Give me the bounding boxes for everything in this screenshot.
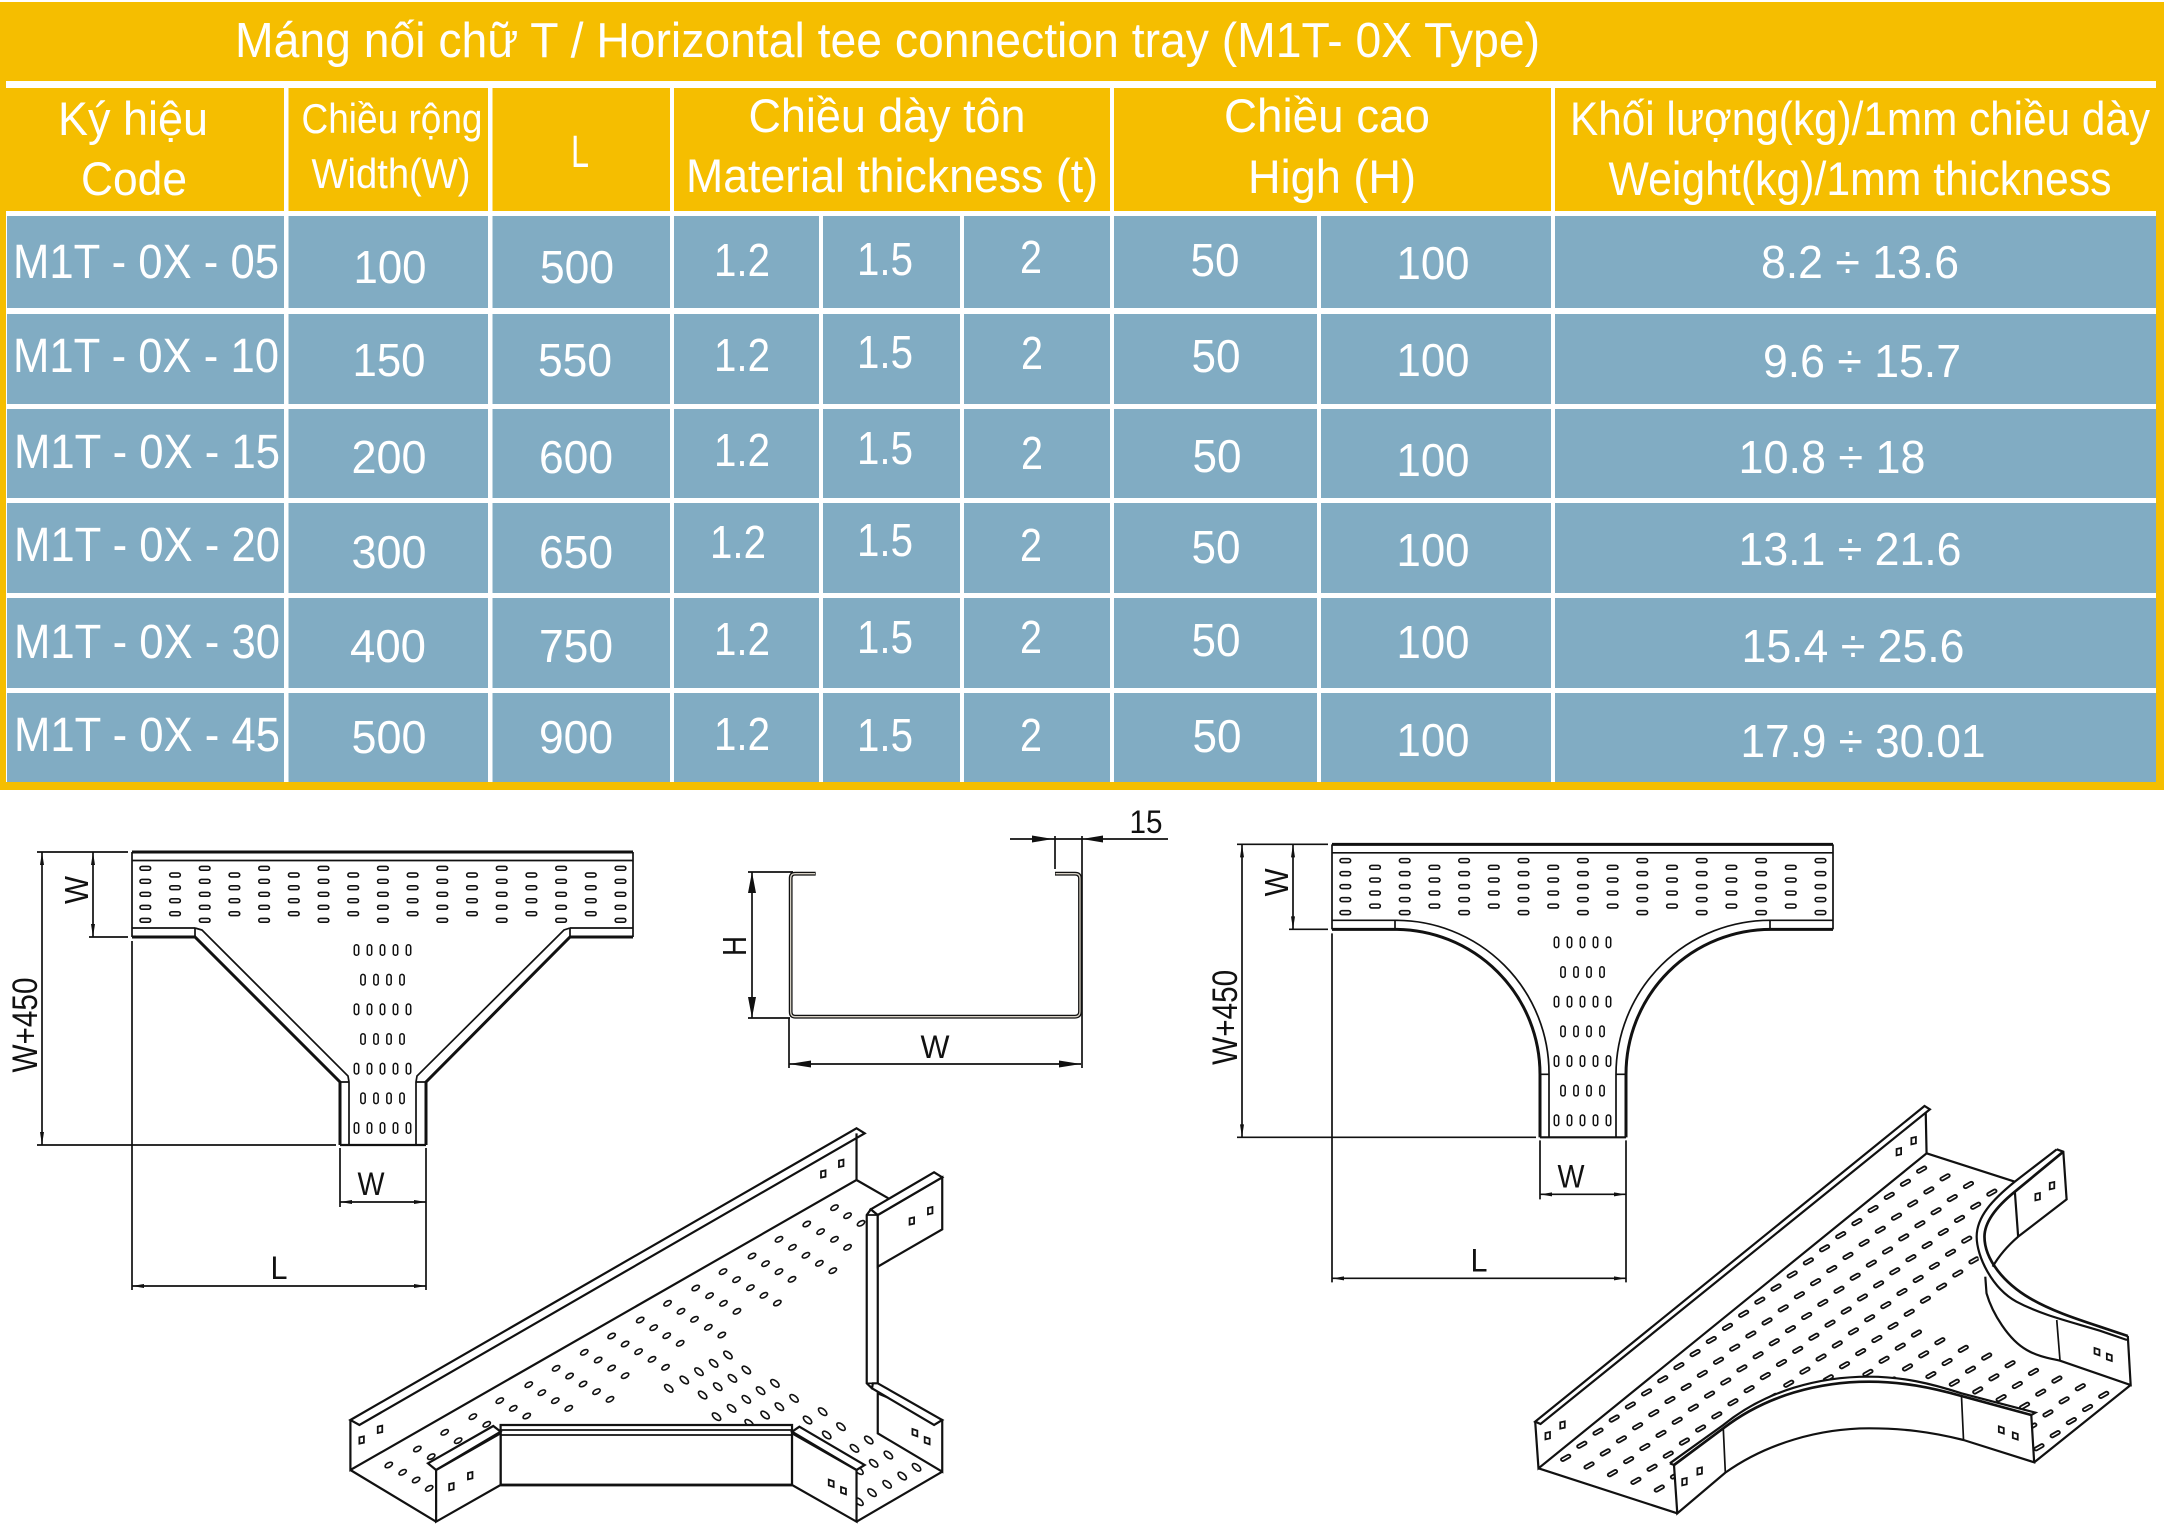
right curved wall bbox=[1977, 1148, 2131, 1385]
dimension lines bbox=[748, 836, 1168, 1068]
table header row: Ký hiệu bbox=[58, 92, 208, 145]
row M1T-0X-45: M1T - 0X - 45 bbox=[14, 709, 280, 762]
floor holes branch bbox=[663, 1350, 922, 1507]
row M1T-0X-15: 100 bbox=[1396, 434, 1470, 486]
front right plate bbox=[792, 1427, 942, 1522]
row M1T-0X-10: 9.6 ÷ 15.7 bbox=[1763, 335, 1961, 387]
drawing: straight tee isometric view bbox=[350, 1128, 942, 1522]
dimension labels bbox=[6, 875, 385, 1286]
row M1T-0X-30: M1T - 0X - 30 bbox=[14, 616, 280, 669]
dimension lines bbox=[37, 852, 426, 1290]
drawing: curved tee plan view with dimensions bbox=[1206, 844, 1833, 1282]
table header row: Width(W) bbox=[312, 150, 470, 197]
perforation holes top bbox=[140, 866, 626, 922]
row M1T-0X-30: 1.5 bbox=[857, 611, 913, 663]
table body background bbox=[7, 216, 2156, 782]
row M1T-0X-30: 400 bbox=[350, 620, 426, 672]
row M1T-0X-05 bbox=[13, 231, 1959, 293]
perforation holes top bbox=[1340, 859, 1826, 915]
dimension labels: W bbox=[58, 875, 95, 904]
dimension labels bbox=[1206, 868, 1585, 1278]
branch side wall and plates bbox=[867, 1172, 942, 1472]
row M1T-0X-45: 50 bbox=[1192, 710, 1242, 762]
row M1T-0X-30: 100 bbox=[1396, 616, 1470, 668]
dimension labels bbox=[716, 804, 1162, 1065]
row M1T-0X-20: 650 bbox=[539, 526, 613, 578]
row M1T-0X-05: 1.5 bbox=[857, 233, 913, 285]
floor holes run bbox=[384, 1204, 866, 1492]
row M1T-0X-05: 1.2 bbox=[714, 234, 770, 286]
row M1T-0X-10: M1T - 0X - 10 bbox=[13, 330, 279, 383]
row M1T-0X-20: 50 bbox=[1192, 521, 1240, 573]
row M1T-0X-45: 100 bbox=[1396, 714, 1470, 766]
row M1T-0X-20: 1.5 bbox=[857, 514, 913, 566]
row M1T-0X-15: 1.5 bbox=[857, 422, 913, 474]
row M1T-0X-20: 2 bbox=[1020, 519, 1042, 571]
row M1T-0X-05: 8.2 ÷ 13.6 bbox=[1761, 236, 1959, 288]
row M1T-0X-05: 100 bbox=[1396, 237, 1470, 289]
row M1T-0X-30: 1.2 bbox=[714, 613, 770, 665]
row M1T-0X-45: 17.9 ÷ 30.01 bbox=[1740, 715, 1986, 767]
row M1T-0X-20: 300 bbox=[352, 526, 426, 578]
drawing: curved tee isometric view bbox=[1535, 1106, 2131, 1513]
row M1T-0X-20: 100 bbox=[1396, 524, 1470, 576]
dimension labels: W+450 bbox=[1206, 970, 1245, 1065]
dimension labels: W bbox=[920, 1029, 950, 1065]
row M1T-0X-15 bbox=[14, 422, 1926, 486]
row M1T-0X-05: 50 bbox=[1190, 234, 1240, 286]
row M1T-0X-05: 2 bbox=[1020, 231, 1042, 283]
row M1T-0X-45: 1.5 bbox=[857, 709, 913, 761]
rear wall bbox=[350, 1128, 888, 1522]
drawing: U-channel cross section bbox=[716, 804, 1168, 1068]
dimension labels: L bbox=[270, 1250, 288, 1286]
row M1T-0X-10: 1.2 bbox=[714, 329, 770, 381]
dimension labels: W bbox=[1558, 1158, 1585, 1194]
row M1T-0X-45 bbox=[14, 708, 1986, 767]
row M1T-0X-20: 13.1 ÷ 21.6 bbox=[1738, 523, 1962, 575]
front curved wall bbox=[1670, 1377, 2035, 1513]
dimension labels: W bbox=[1258, 868, 1295, 896]
floor holes branch bbox=[1846, 1330, 2109, 1451]
row M1T-0X-10: 2 bbox=[1021, 327, 1043, 379]
row M1T-0X-10: 550 bbox=[538, 334, 612, 386]
table header row: Material thickness (t) bbox=[686, 149, 1098, 202]
perforation holes centre bbox=[1554, 937, 1611, 1126]
dimension labels: W bbox=[358, 1166, 385, 1202]
table header row: Chiều rộng bbox=[302, 95, 482, 142]
table panel bbox=[0, 2, 2164, 790]
dimension labels: H bbox=[716, 936, 753, 956]
table column dividers bbox=[284, 211, 1555, 782]
title: Máng nối chữ T / Horizontal tee connection tray (M1T- 0X Type) bbox=[235, 14, 1540, 68]
row M1T-0X-30: 15.4 ÷ 25.6 bbox=[1742, 620, 1964, 672]
row M1T-0X-10: 50 bbox=[1192, 330, 1240, 382]
row M1T-0X-05: 100 bbox=[354, 241, 426, 293]
row M1T-0X-15: 2 bbox=[1021, 427, 1043, 479]
row M1T-0X-05: M1T - 0X - 05 bbox=[13, 236, 279, 289]
table header row: Weight(kg)/1mm thickness bbox=[1608, 152, 2112, 205]
row M1T-0X-20 bbox=[14, 514, 1962, 578]
row M1T-0X-15: M1T - 0X - 15 bbox=[14, 426, 280, 479]
table header row: Chiều cao bbox=[1224, 89, 1430, 142]
tray outline straight bbox=[132, 852, 633, 1145]
row M1T-0X-20: 1.2 bbox=[710, 516, 766, 568]
dimension lines bbox=[1237, 844, 1626, 1282]
row M1T-0X-20: M1T - 0X - 20 bbox=[14, 519, 280, 572]
row M1T-0X-45: 900 bbox=[539, 711, 613, 763]
row M1T-0X-45: 2 bbox=[1020, 709, 1042, 761]
dimension labels: 15 bbox=[1130, 804, 1162, 840]
front left plate bbox=[428, 1426, 501, 1522]
table header row: Code bbox=[81, 152, 187, 205]
row M1T-0X-15: 50 bbox=[1192, 430, 1242, 482]
dimension labels: W+450 bbox=[6, 978, 45, 1072]
row M1T-0X-15: 200 bbox=[352, 431, 426, 483]
row M1T-0X-05: 500 bbox=[540, 241, 614, 293]
row M1T-0X-10: 1.5 bbox=[857, 326, 913, 378]
row M1T-0X-30 bbox=[14, 611, 1964, 672]
row M1T-0X-30: 50 bbox=[1192, 614, 1240, 666]
dimension labels: L bbox=[1470, 1242, 1488, 1278]
table header row: Chiều dày tôn bbox=[748, 89, 1026, 142]
row M1T-0X-15: 1.2 bbox=[714, 424, 770, 476]
table header row: L bbox=[571, 126, 589, 177]
floor holes run bbox=[1560, 1166, 2044, 1500]
perforation holes centre bbox=[354, 945, 411, 1133]
row M1T-0X-30: 750 bbox=[539, 620, 613, 672]
profile shape bbox=[791, 874, 1080, 1017]
row M1T-0X-45: 1.2 bbox=[714, 708, 770, 760]
rear wall bbox=[1535, 1106, 2131, 1513]
table header row bbox=[0, 88, 2164, 211]
table header row: High (H) bbox=[1248, 150, 1416, 203]
row M1T-0X-30: 2 bbox=[1020, 611, 1042, 663]
tray outline curved bbox=[1332, 844, 1833, 1137]
row M1T-0X-10 bbox=[13, 326, 1961, 387]
row M1T-0X-10: 100 bbox=[1396, 334, 1470, 386]
row M1T-0X-15: 10.8 ÷ 18 bbox=[1738, 431, 1926, 483]
row M1T-0X-15: 600 bbox=[539, 431, 613, 483]
row M1T-0X-10: 150 bbox=[352, 334, 426, 386]
row M1T-0X-45: 500 bbox=[352, 711, 426, 763]
front centre panel bbox=[501, 1425, 792, 1485]
drawing: straight tee plan view with dimensions bbox=[6, 852, 633, 1290]
